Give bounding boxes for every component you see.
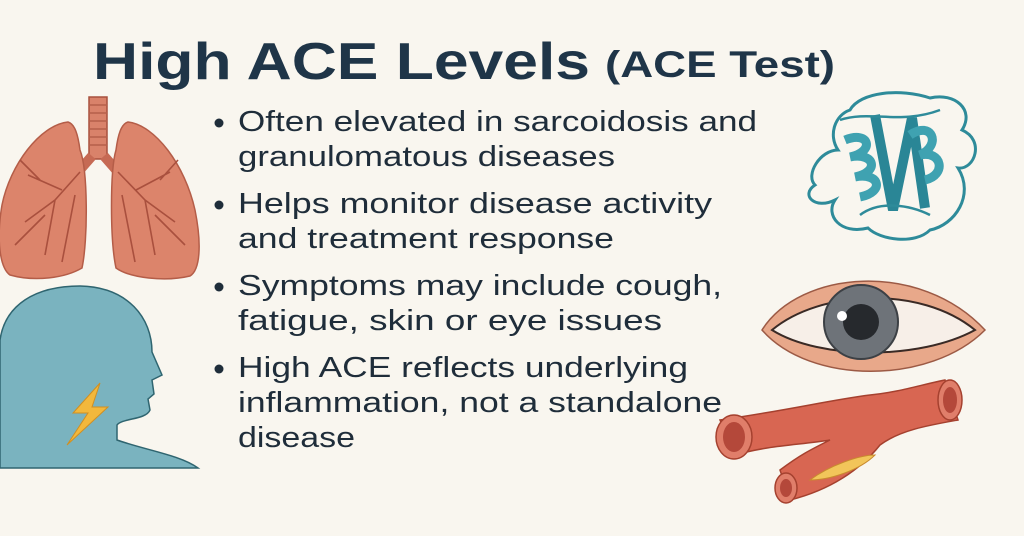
bullet 3: fatigue, skin or eye issues [238,305,662,337]
icon: lungs [0,97,199,279]
icon: eye [762,281,985,371]
bullet 4: disease [238,422,355,454]
bullet 2: Helps monitor disease activity [238,188,713,220]
bullet 1 [214,106,757,173]
icon: head silhouette with lightning [0,286,198,468]
bullet 4: inflammation, not a standalone [238,387,722,419]
bullet 2: and treatment response [238,223,614,255]
icon: protein ribbon [809,93,975,239]
bullet 1: Often elevated in sarcoidosis and [238,106,757,138]
title: (ACE Test) [605,44,835,85]
title: High ACE Levels [93,33,590,91]
bullet 3 [214,270,722,337]
bullet 1: granulomatous diseases [238,141,615,173]
bullet 2 [214,188,713,255]
icon: artery [716,380,962,503]
bullet 4 [214,352,722,454]
title [93,33,835,91]
bullet list [214,106,757,454]
bullet 4: High ACE reflects underlying [238,352,688,384]
bullet 3: Symptoms may include cough, [238,270,722,302]
